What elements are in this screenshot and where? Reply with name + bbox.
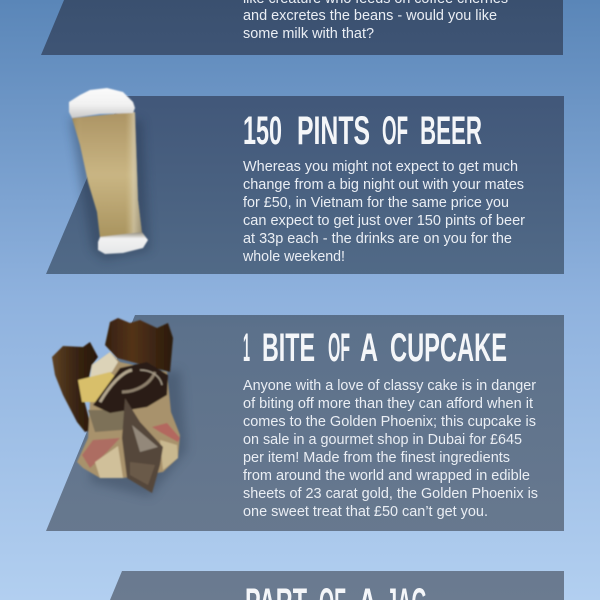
icon: golden phoenix cupcake (52, 318, 187, 497)
text block: beer description: whole weekend! (242, 249, 345, 265)
panel shape (46, 315, 564, 531)
text block: beer description: for £50, in Vietnam for the same price you (243, 195, 509, 211)
text block: coffee description: some milk with that? (243, 26, 374, 42)
text block: cupcake description (243, 378, 538, 520)
text block: cupcake description: on sale in a gourmet shop in Dubai for £645 (243, 432, 522, 448)
heading: 150 pints of beer (243, 109, 482, 153)
text block: coffee description (243, 0, 508, 42)
text block: cupcake description: Anyone with a love of classy cake is in danger (243, 378, 536, 394)
panel: cupcake (46, 315, 564, 531)
text block: beer description: change from a big night out with your mates (243, 177, 524, 193)
panel: kopi luwak coffee (partial) (41, 0, 563, 55)
text block: cupcake description: of biting off more than they can afford when it (243, 396, 533, 412)
heading: 150 pints of beer: BEER (420, 109, 482, 153)
heading: 150 pints of beer: OF (382, 109, 408, 153)
panel shape (46, 96, 564, 274)
text block: cupcake description: sheets of 23 carat gold, the Golden Phoenix is (243, 486, 538, 502)
text block: coffee description: and excretes the beans - would you like (243, 8, 497, 24)
text block: beer description (242, 159, 525, 265)
text block: cupcake description: per item! Made from the finest ingredients (243, 450, 510, 466)
panel: part of a jag (partial) (110, 571, 564, 600)
heading: part of a jag (245, 581, 427, 600)
heading: 1 bite of a cupcake: A (360, 326, 378, 370)
text block: beer description: can expect to get just over 150 pints of beer (243, 213, 525, 229)
heading: 150 pints of beer: PINTS (297, 109, 370, 153)
text block: beer description: at 33p each - the drinks are on you for the (243, 231, 512, 247)
text block: beer description: Whereas you might not expect to get much (243, 159, 518, 175)
text block: cupcake description: one sweet treat that £50 can’t get you. (243, 504, 488, 520)
text block: cupcake description: comes to the Golden Phoenix; this cupcake is (243, 414, 536, 430)
icon: pint glass of beer (69, 88, 150, 260)
text block: cupcake description: from around the world and wrapped in edible (243, 468, 530, 484)
heading: 1 bite of a cupcake (243, 326, 507, 370)
panel shape (41, 0, 563, 55)
heading: 1 bite of a cupcake: CUPCAKE (390, 326, 507, 370)
heading: 150 pints of beer: 150 (243, 109, 282, 153)
heading: 1 bite of a cupcake: 1 (243, 326, 250, 370)
heading: 1 bite of a cupcake: BITE (262, 326, 315, 370)
panel: beer (46, 88, 564, 274)
heading: 1 bite of a cupcake: OF (328, 326, 350, 370)
panel shape (110, 571, 564, 600)
